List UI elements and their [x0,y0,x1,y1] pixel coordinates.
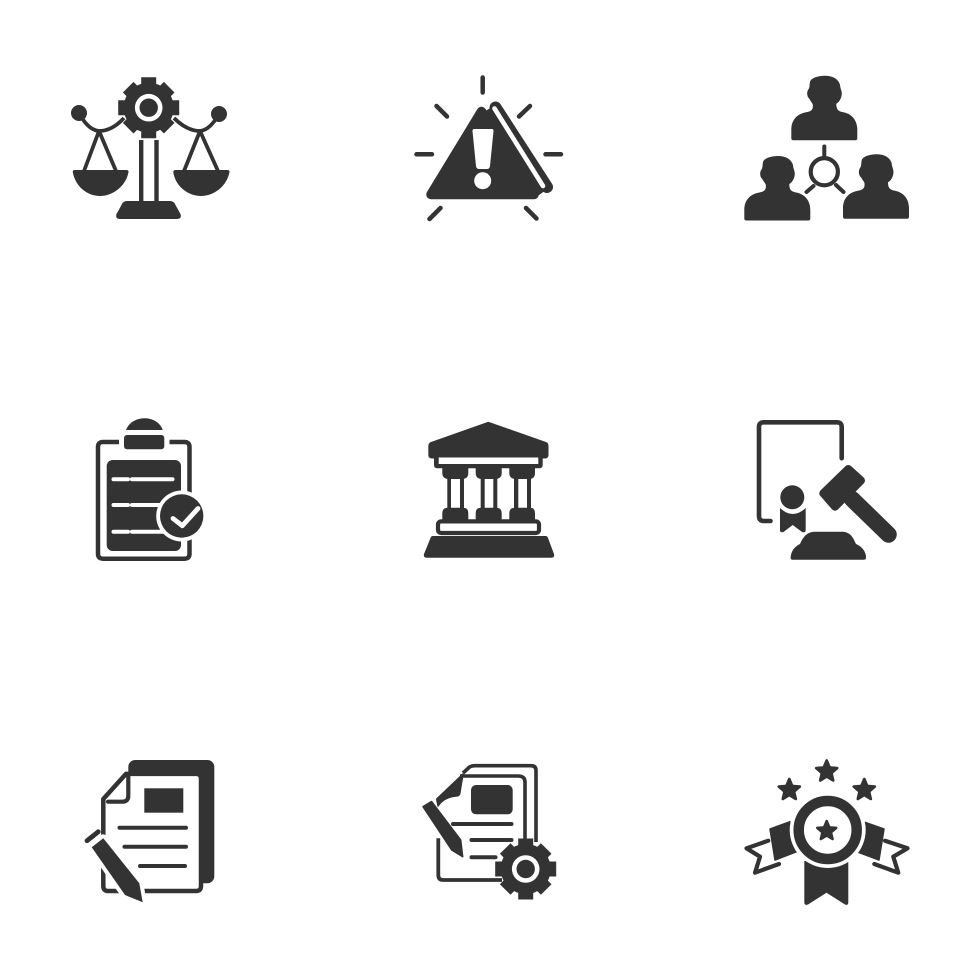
icon: classical bank building [424,422,554,558]
icon: document with pencil and gear [423,766,556,900]
icon: warning triangle with exclamation mark [416,78,561,219]
icon: balance scale with gear [71,77,230,219]
icon: certificate with gavel [759,422,888,560]
icon: clipboard with check badge [98,418,207,559]
icon: documents with pencil [87,760,214,902]
icon: three people connected by a node [744,76,909,220]
icon: award medal with ribbon and stars [746,760,908,905]
